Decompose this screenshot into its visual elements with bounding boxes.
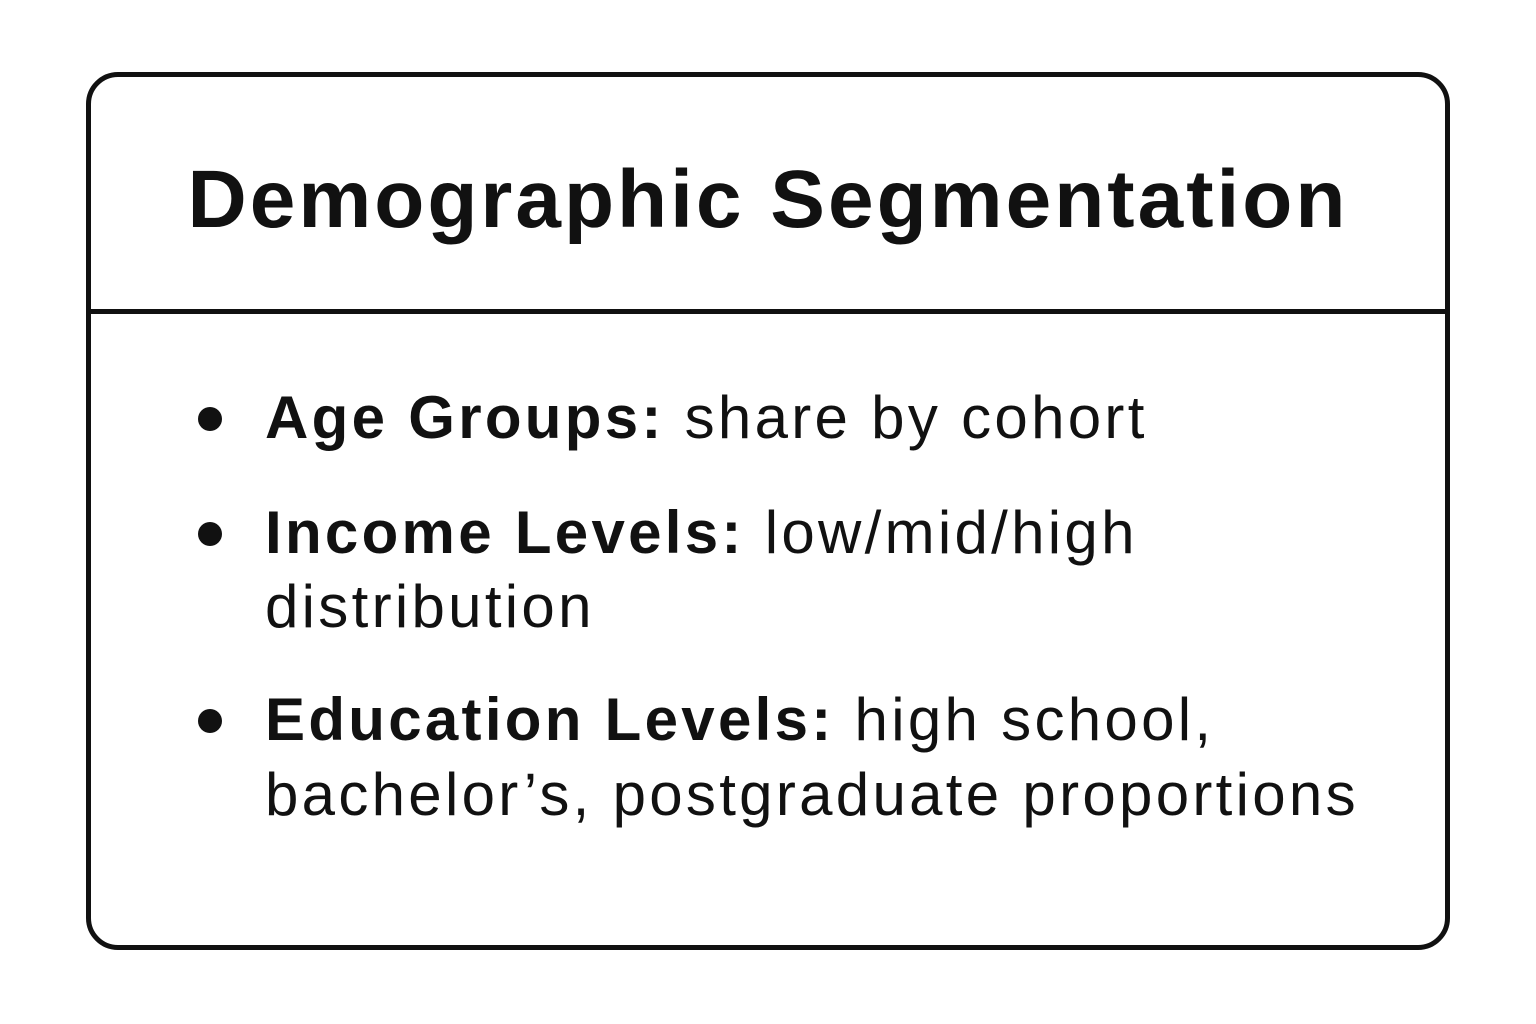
bullet list: Income Levels: low/mid/high — [265, 499, 1138, 566]
bullet: education levels — [198, 686, 1359, 828]
panel: card — [86, 72, 1450, 950]
bullet list — [198, 384, 1359, 828]
bullet list: Age Groups: share by cohort — [265, 384, 1148, 451]
bullet: income levels — [198, 499, 1138, 640]
bullet list: bachelor’s, postgraduate proportions — [265, 761, 1359, 828]
bullet list: Education Levels: high school, — [265, 686, 1214, 753]
bullet: age groups — [198, 384, 1148, 451]
title: Demographic Segmentation — [188, 154, 1348, 245]
bullet list: distribution — [265, 573, 595, 640]
